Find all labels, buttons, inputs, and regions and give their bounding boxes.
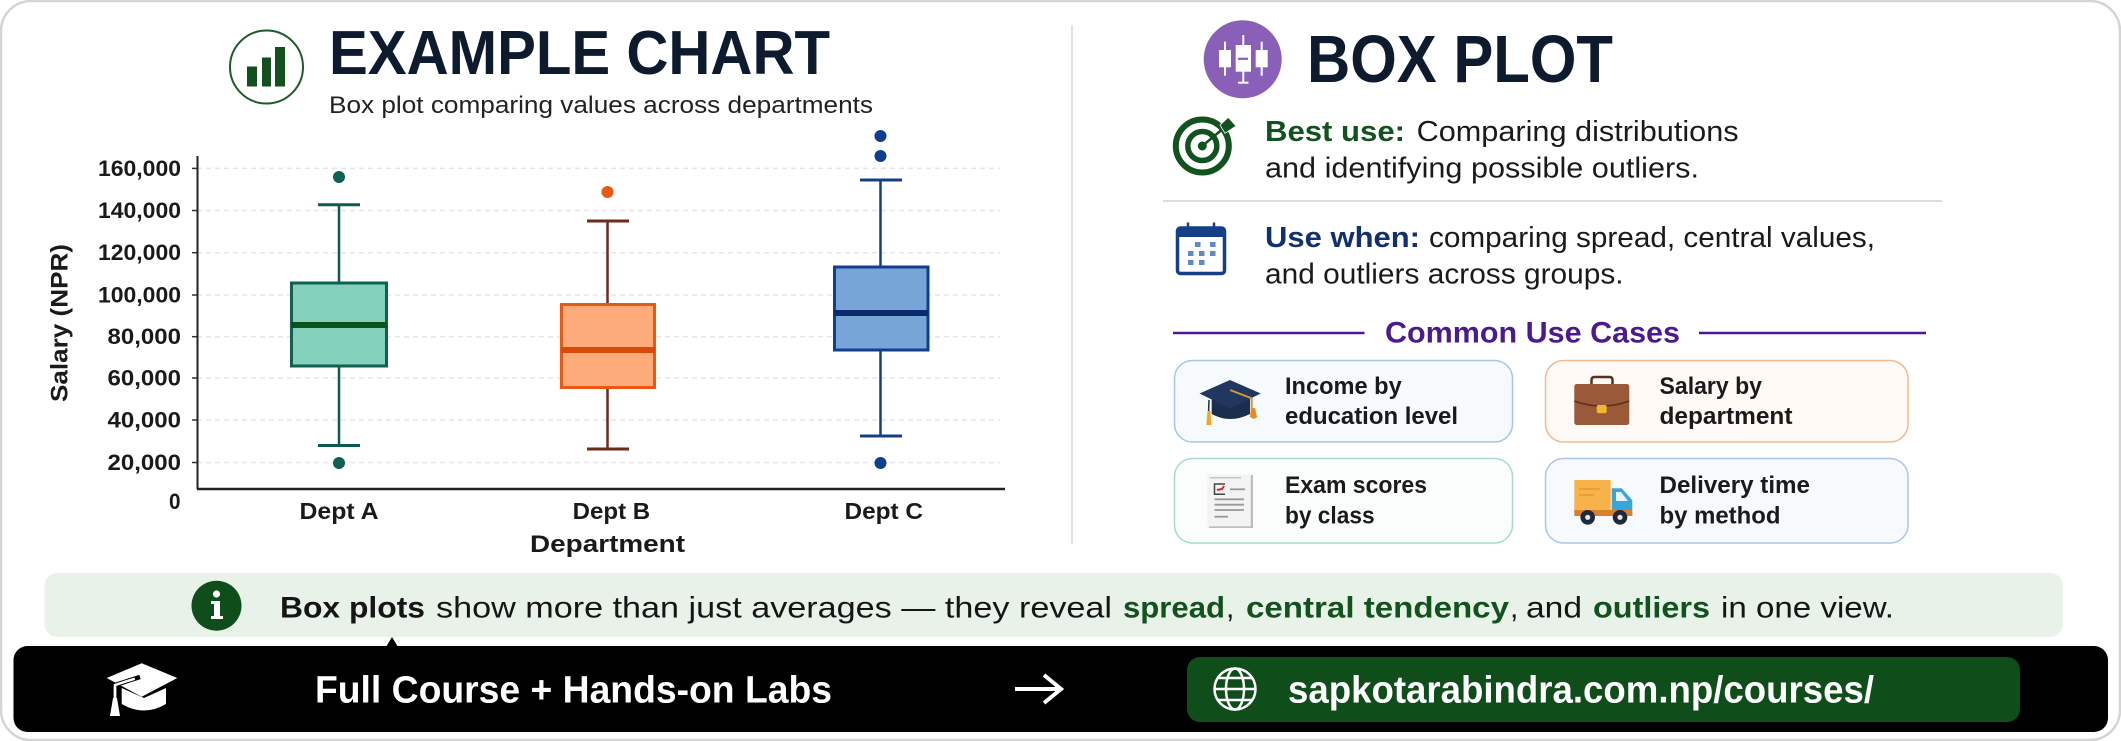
y axis tick labels: 0	[169, 489, 180, 514]
icon: globe	[1214, 668, 1256, 710]
card: salary by department: department	[1660, 403, 1792, 430]
icon: target with dart	[1176, 117, 1236, 172]
card: exam scores by class: by class	[1285, 503, 1375, 530]
box: Dept A	[291, 171, 387, 469]
title: example chart: EXAMPLE CHART	[329, 18, 830, 88]
card: exam scores by class	[1174, 458, 1512, 543]
arrow	[1015, 675, 1061, 703]
text: use when: comparing spread, central values,	[1429, 222, 1875, 254]
info banner: outliers	[1593, 591, 1710, 624]
icon: calendar	[1178, 222, 1224, 274]
box: Dept C	[834, 130, 928, 469]
y axis tick labels: 20,000	[108, 450, 181, 475]
y axis tick labels: 120,000	[98, 240, 181, 265]
url button: sapkotarabindra.com.np/courses/	[1288, 670, 1874, 712]
card: delivery time by method: by method	[1660, 503, 1780, 530]
heading: common use cases: Common Use Cases	[1385, 316, 1680, 350]
card: income by education level	[1174, 360, 1512, 442]
x axis labels: Dept C	[844, 498, 923, 524]
icon: box plot in purple circle	[1204, 20, 1282, 98]
subtitle: Box plot comparing values across departments	[329, 92, 873, 119]
call to action bar	[14, 637, 2108, 732]
card: delivery time by method	[1546, 458, 1908, 543]
y axis tick labels: 100,000	[98, 282, 181, 308]
x axis labels: Dept A	[300, 498, 378, 524]
info banner: central tendency	[1246, 591, 1509, 624]
info banner: in one view.	[1721, 591, 1894, 624]
icon: info	[192, 581, 242, 631]
box: Dept B	[561, 186, 655, 449]
card: salary by department: Salary by	[1660, 373, 1762, 400]
icon: white graduation cap	[107, 663, 177, 716]
card: income by education level: Income by	[1285, 373, 1402, 400]
icon: exam paper	[1207, 474, 1253, 528]
title: box plot: BOX PLOT	[1307, 22, 1613, 97]
info banner: show more than just averages — they reveal	[436, 591, 1112, 624]
y axis tick labels	[98, 156, 181, 514]
text: best use: Comparing distributions	[1417, 116, 1739, 148]
text: best use	[1265, 116, 1739, 184]
x axis labels	[300, 498, 923, 524]
info banner: Box plots	[280, 591, 425, 624]
y axis tick labels: 80,000	[108, 324, 181, 349]
text: best use: Best use:	[1265, 116, 1405, 148]
info banner: and	[1526, 591, 1582, 624]
icon: delivery truck	[1574, 480, 1632, 525]
text: best use: and identifying possible outliers.	[1265, 152, 1699, 184]
x axis title: Department	[530, 531, 685, 558]
info banner: ,	[1510, 591, 1518, 624]
text: full course: Full Course + Hands-on Labs	[315, 670, 832, 712]
box plot chart	[46, 130, 1005, 558]
icon: bar chart in circle	[230, 30, 303, 104]
y axis tick labels: 40,000	[108, 408, 181, 432]
info banner	[44, 573, 2063, 637]
y axis tick labels: 60,000	[108, 366, 181, 390]
card: exam scores by class: Exam scores	[1285, 472, 1427, 499]
x axis labels: Dept B	[573, 498, 650, 524]
y axis tick labels: 160,000	[98, 156, 181, 181]
icon: graduation cap	[1200, 380, 1261, 425]
icon: briefcase	[1574, 377, 1629, 425]
y axis tick labels: 140,000	[98, 198, 181, 223]
text: use when: and outliers across groups.	[1265, 259, 1624, 291]
info banner: spread	[1123, 591, 1225, 624]
y axis title: Salary (NPR)	[46, 244, 74, 402]
text: use when	[1265, 222, 1875, 291]
card: delivery time by method: Delivery time	[1660, 472, 1810, 499]
text: use when: Use when:	[1265, 222, 1420, 254]
info banner: ,	[1226, 591, 1234, 624]
card: income by education level: education level	[1285, 403, 1458, 430]
card: salary by department	[1546, 360, 1908, 442]
url button	[1187, 657, 2020, 722]
